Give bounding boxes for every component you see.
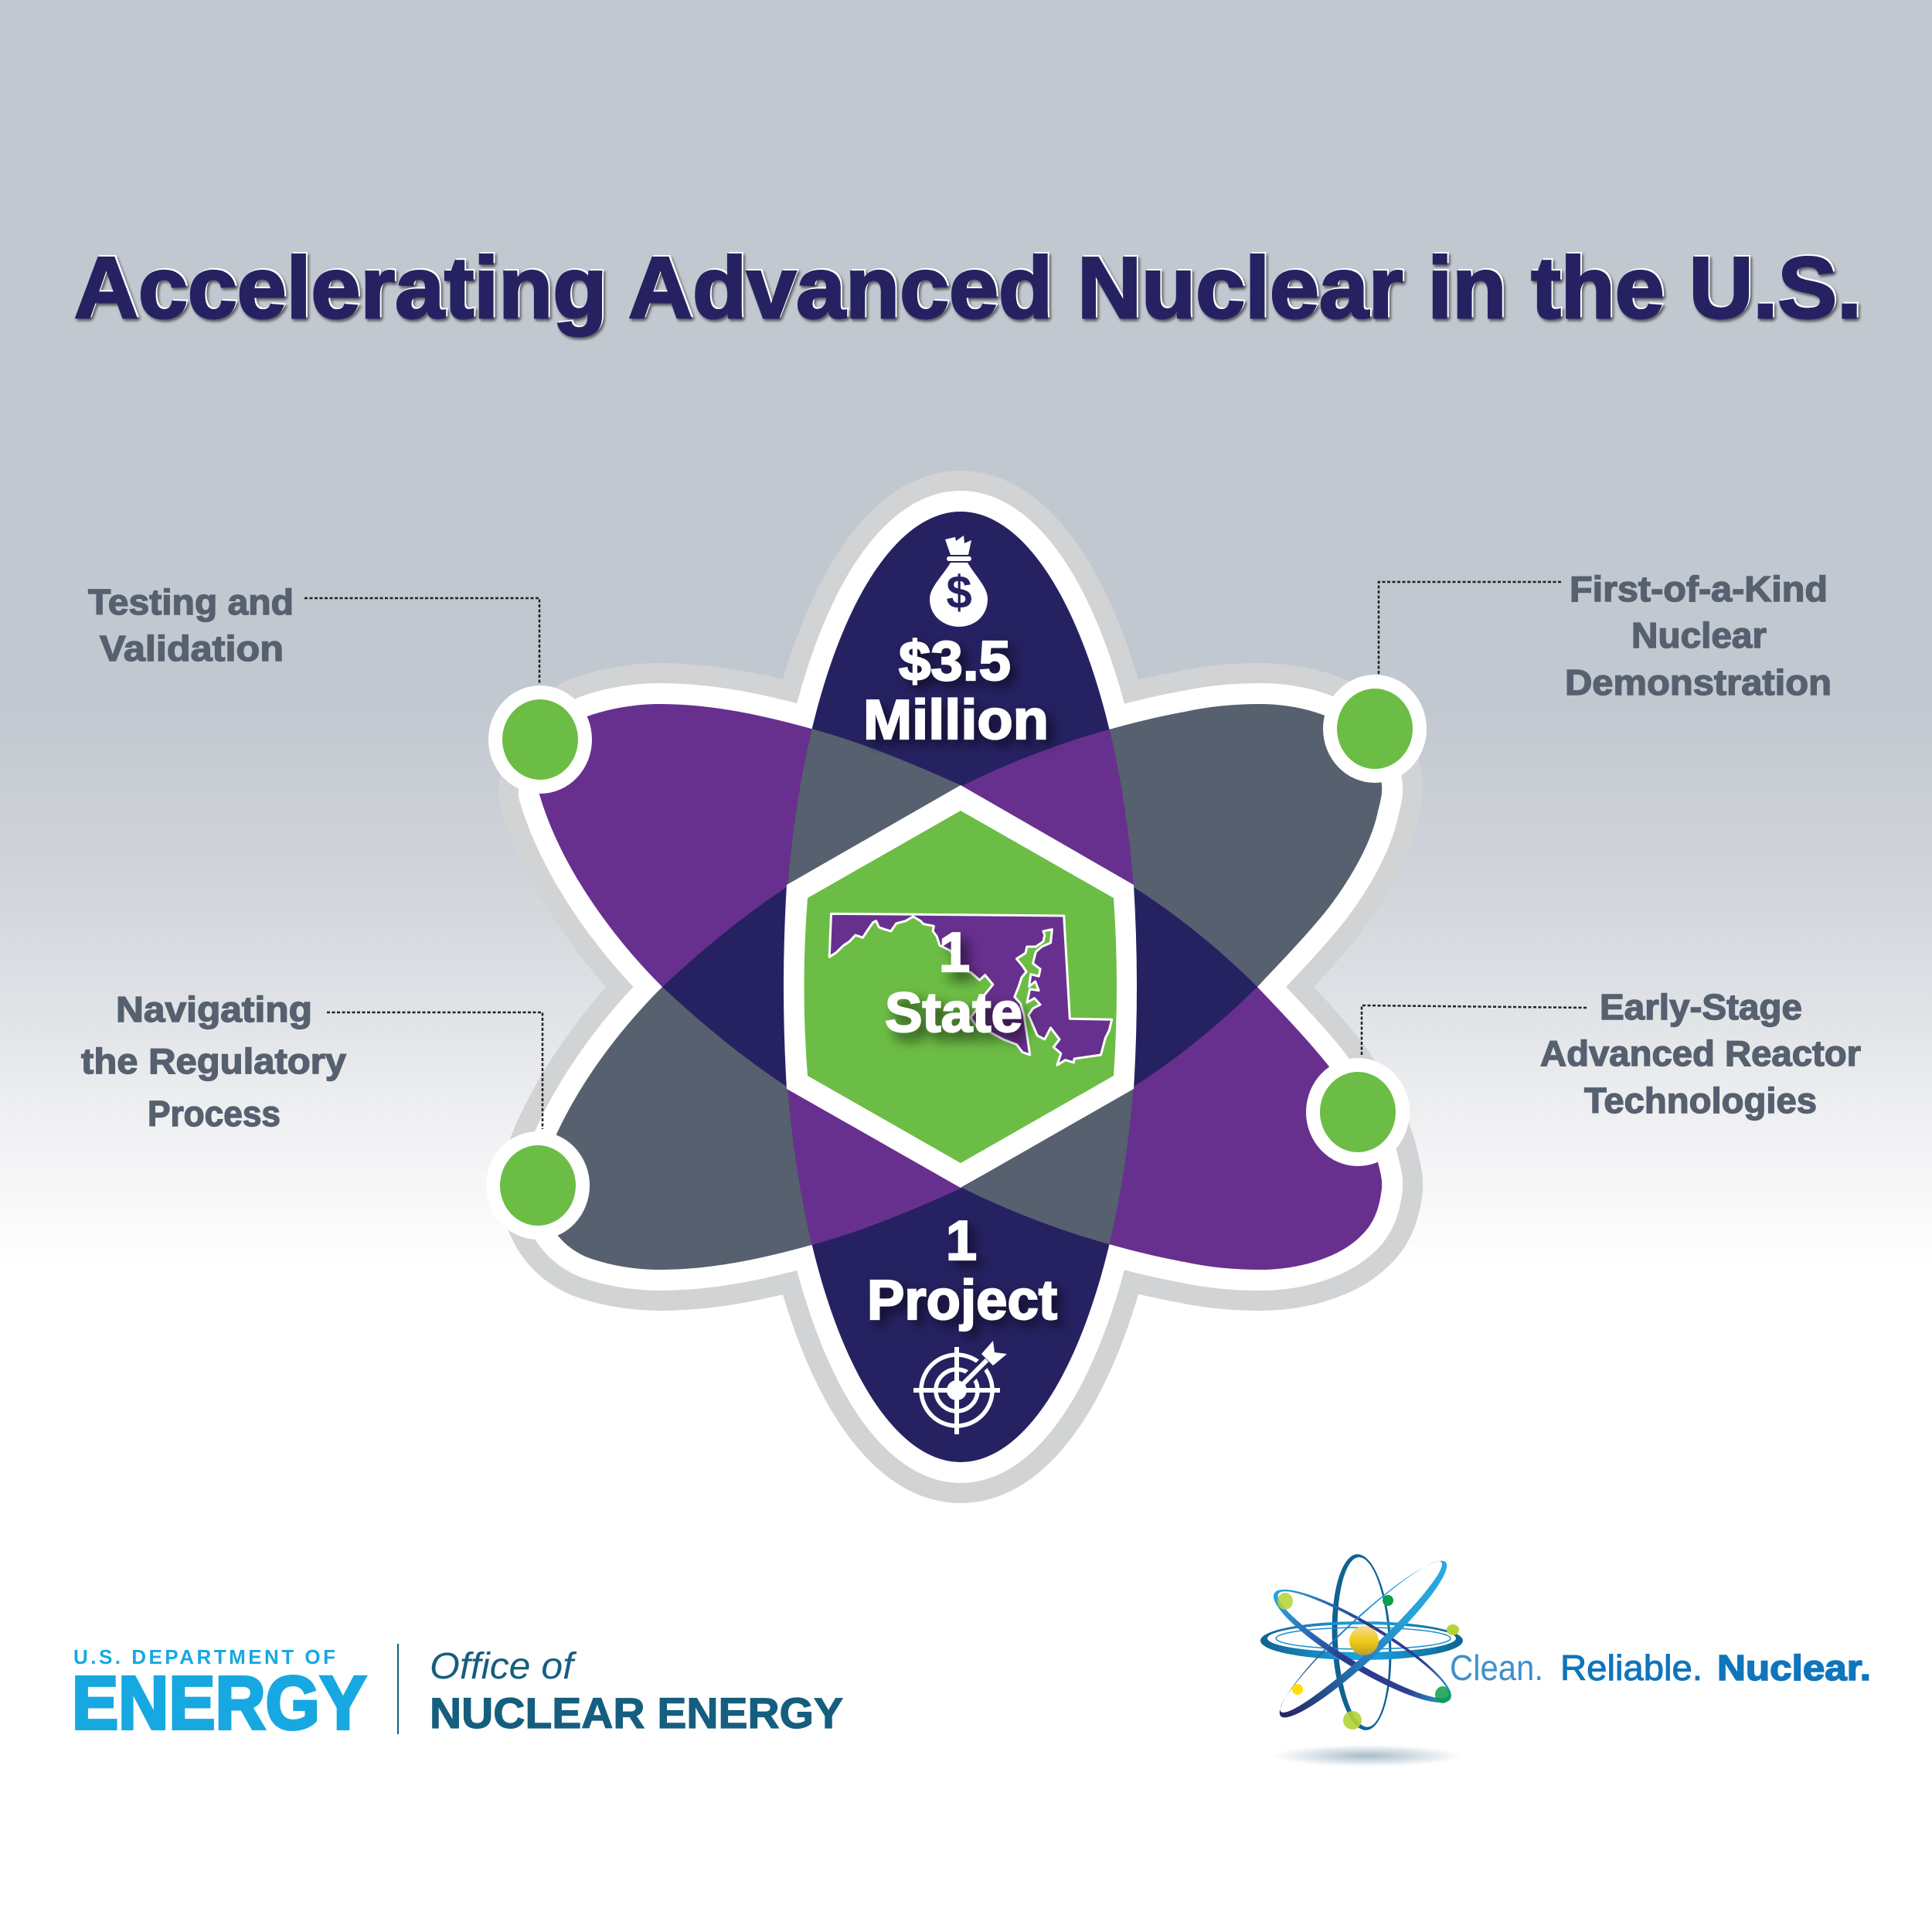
funding text: $3.5 Million: $3.5 bbox=[899, 631, 1011, 692]
purple orbit bbox=[539, 704, 1382, 1270]
label: early-stage advanced reactor technologies: Early-Stage bbox=[1600, 987, 1802, 1027]
node: top right bbox=[1323, 675, 1427, 783]
icon: money bag bbox=[930, 536, 988, 627]
center text: 1 State: State bbox=[885, 982, 1022, 1044]
connector: first-of-a-kind bbox=[1379, 582, 1561, 674]
center text: 1 State: 1 bbox=[939, 922, 970, 984]
project text: 1 Project: Project bbox=[867, 1270, 1057, 1332]
label: navigating the regulatory process: Navigating bbox=[116, 989, 312, 1029]
atom outer grey and white outline bbox=[539, 512, 1382, 1462]
label: navigating the regulatory process: Process bbox=[148, 1094, 281, 1134]
center text: 1 State bbox=[885, 922, 1022, 1044]
project text: 1 Project: 1 bbox=[946, 1210, 977, 1272]
hexagon white border bbox=[784, 785, 1137, 1188]
icon: target with arrow bbox=[913, 1341, 1007, 1434]
node: top left bbox=[488, 685, 592, 794]
logo: department of energy: ENERGY bbox=[72, 1661, 366, 1745]
node: bottom left bbox=[486, 1131, 590, 1240]
funding text: $3.5 Million bbox=[863, 631, 1049, 751]
connector: navigating the regulatory process bbox=[327, 1012, 543, 1129]
label: first-of-a-kind nuclear demonstration bbox=[1565, 569, 1832, 702]
icon: money bag: $ bbox=[946, 566, 972, 618]
label: first-of-a-kind nuclear demonstration: Nuclear bbox=[1631, 615, 1767, 655]
logo: department of energy: NUCLEAR ENERGY bbox=[430, 1689, 843, 1737]
label: early-stage advanced reactor technologies: Advanced Reactor bbox=[1540, 1033, 1861, 1073]
label: testing and validation bbox=[88, 582, 294, 668]
label: early-stage advanced reactor technologies bbox=[1540, 987, 1861, 1121]
overlap: vertical and slate orbit bbox=[788, 730, 1133, 1245]
label: testing and validation: Testing and bbox=[88, 582, 294, 622]
logo: department of energy: Office of bbox=[430, 1646, 577, 1687]
logo: department of energy bbox=[72, 1644, 843, 1745]
hexagon green core bbox=[804, 811, 1117, 1163]
connector: testing and validation bbox=[304, 598, 539, 685]
label: early-stage advanced reactor technologies: Technologies bbox=[1584, 1080, 1817, 1121]
connector: early-stage bbox=[1362, 1005, 1587, 1056]
tagline: clean reliable nuclear: Reliable. bbox=[1560, 1648, 1702, 1688]
slate orbit bbox=[539, 704, 1382, 1270]
atom diagram bbox=[464, 464, 1468, 1507]
label: navigating the regulatory process bbox=[81, 989, 346, 1134]
label: first-of-a-kind nuclear demonstration: First-of-a-Kind bbox=[1570, 569, 1828, 609]
funding text: $3.5 Million: Million bbox=[863, 689, 1049, 751]
overlap: vertical and purple orbit bbox=[788, 729, 1133, 1244]
navy vertical orbit bbox=[784, 512, 1138, 1462]
tagline: clean reliable nuclear: Nuclear. bbox=[1717, 1648, 1871, 1688]
logo: atom mark bbox=[1260, 1547, 1463, 1767]
node: right bbox=[1306, 1058, 1410, 1166]
overlap: purple and slate orbit bbox=[662, 786, 1257, 1188]
map of Maryland bbox=[829, 913, 1112, 1065]
label: testing and validation: Validation bbox=[100, 628, 284, 668]
project text: 1 Project bbox=[867, 1210, 1057, 1332]
logo: department of energy: U.S. DEPARTMENT OF bbox=[73, 1645, 335, 1668]
tagline: clean reliable nuclear bbox=[1450, 1648, 1871, 1688]
title: Accelerating Advanced Nuclear in the U.S. bbox=[74, 240, 1862, 336]
label: first-of-a-kind nuclear demonstration: Demonstration bbox=[1565, 662, 1832, 702]
tagline: clean reliable nuclear: Clean. bbox=[1450, 1648, 1543, 1688]
label: navigating the regulatory process: the Regulatory bbox=[81, 1041, 346, 1081]
